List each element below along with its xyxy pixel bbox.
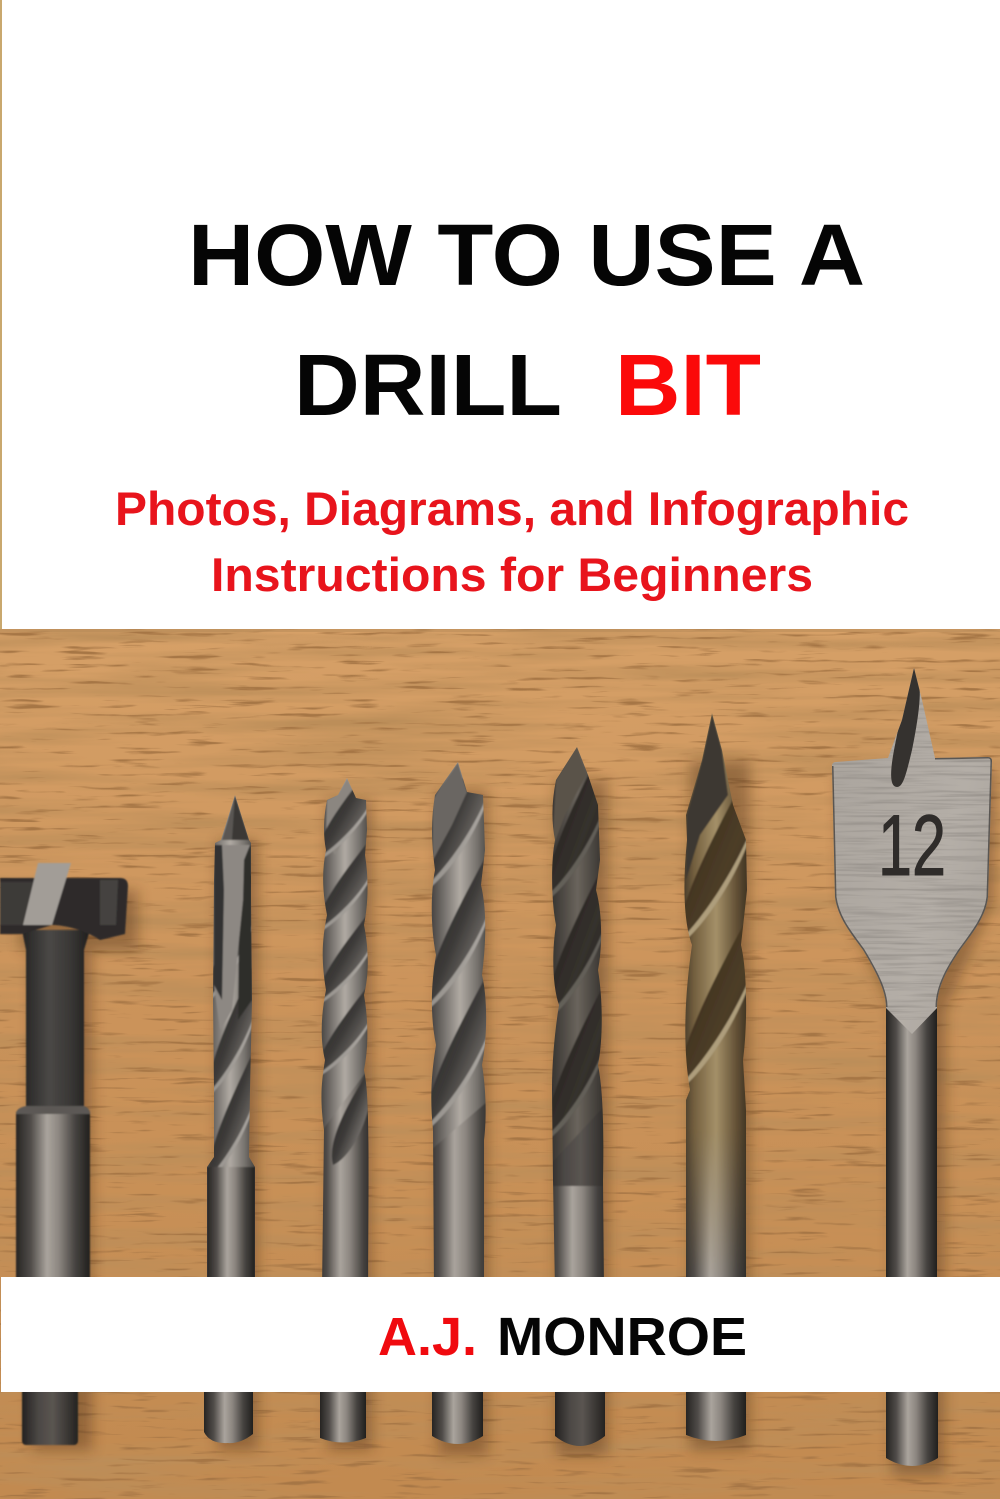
author name: A.J. bbox=[378, 1307, 477, 1367]
title: DRILL bbox=[294, 337, 562, 434]
author name bbox=[378, 1307, 747, 1367]
author name: MONROE bbox=[497, 1307, 747, 1367]
subtitle: Instructions for Beginners bbox=[211, 548, 813, 601]
author band bbox=[1, 1277, 1000, 1392]
left spine edge bbox=[0, 0, 2, 630]
bit 7 lower shank bbox=[886, 1385, 938, 1466]
number 12 on spade: 12 bbox=[878, 798, 946, 894]
bit 3 lower shank bbox=[320, 1385, 366, 1442]
photo: wood background bbox=[0, 629, 1000, 1499]
shadows under bits bbox=[20, 760, 996, 1475]
bit 3: twist drill bbox=[321, 778, 368, 1277]
subtitle: Photos, Diagrams, and Infographic bbox=[115, 482, 909, 535]
title: BIT bbox=[615, 337, 761, 434]
subtitle bbox=[115, 482, 909, 601]
bit 7: spade bit bbox=[832, 668, 992, 1277]
bit 6: bronze twist drill bbox=[684, 714, 747, 1277]
title bbox=[188, 207, 865, 434]
bit 5: black twist drill bbox=[552, 747, 604, 1277]
bit 2: brad point bbox=[207, 795, 255, 1277]
bit 4: twist drill bbox=[431, 762, 486, 1277]
bit 1: forstner bbox=[0, 863, 128, 1445]
bit 4 lower shank bbox=[432, 1385, 483, 1444]
title: HOW TO USE A bbox=[188, 207, 865, 304]
bit 5 lower shank bbox=[555, 1385, 605, 1446]
bit 6 lower shank bbox=[686, 1385, 746, 1441]
bit 2 lower shank bbox=[204, 1385, 253, 1443]
